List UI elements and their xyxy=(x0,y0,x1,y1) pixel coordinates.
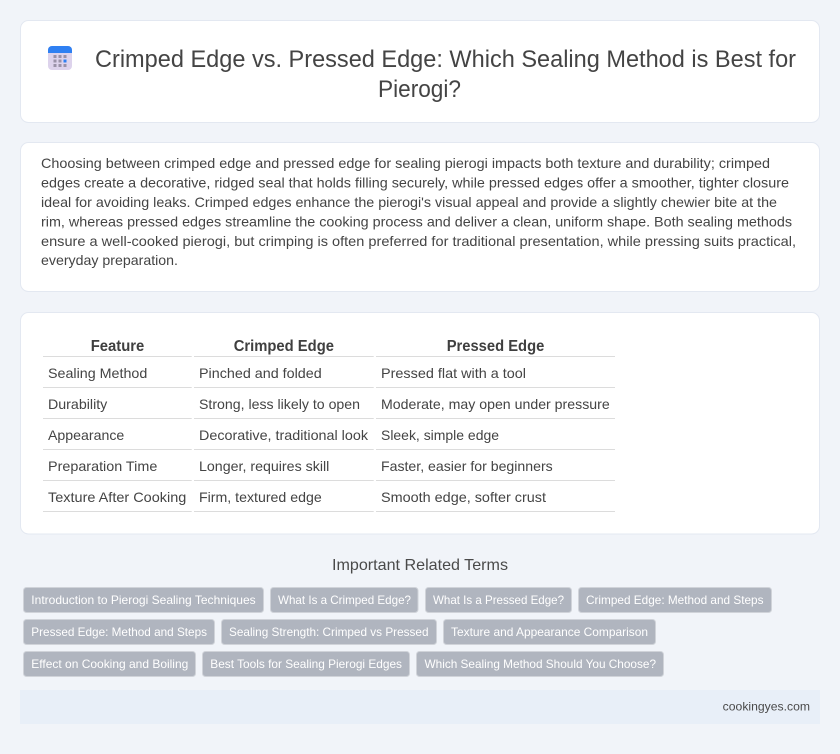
tag xyxy=(24,588,264,612)
tag xyxy=(444,620,656,644)
table row: texture after cooking xyxy=(48,489,546,505)
text block: intro paragraph: Choosing between crimped edge and pressed edge for sealing pierogi impacts both texture and durability; crimped xyxy=(41,155,770,171)
table row: texture after cooking: Smooth edge, softer crust xyxy=(381,489,546,505)
table header row: Feature xyxy=(91,338,144,355)
text block: intro paragraph: ideal for avoiding leaks. Crimped edges enhance the pierogi's visual appeal and provide a slightly chewier bite at the xyxy=(41,194,777,210)
table row: durability: Durability xyxy=(48,396,107,412)
tag xyxy=(416,652,664,676)
tag xyxy=(24,620,214,644)
table header row xyxy=(91,338,544,355)
table row: appearance: Appearance xyxy=(48,427,125,443)
panel: introduction xyxy=(20,142,820,292)
table row: texture after cooking: Firm, textured edge xyxy=(199,489,322,505)
text block: intro paragraph xyxy=(41,155,796,268)
tag: Introduction to Pierogi Sealing Techniques xyxy=(31,593,256,607)
title xyxy=(95,46,796,103)
text block: intro paragraph: everyday preparation. xyxy=(41,252,178,268)
table row: preparation time: Preparation Time xyxy=(48,458,158,474)
table row: sealing method: Sealing Method xyxy=(48,365,147,381)
table row: preparation time xyxy=(48,458,553,474)
tag: What Is a Pressed Edge? xyxy=(433,593,564,607)
icon: calendar xyxy=(48,46,72,70)
tag xyxy=(24,652,196,676)
table row: preparation time: Longer, requires skill xyxy=(199,458,329,474)
tag: Texture and Appearance Comparison xyxy=(451,625,648,639)
tag xyxy=(222,620,436,644)
table row: appearance xyxy=(48,427,499,443)
tag list: related terms xyxy=(24,588,772,676)
table header row: Pressed Edge xyxy=(447,338,544,355)
tag xyxy=(202,652,410,676)
table row: preparation time: Faster, easier for beginners xyxy=(381,458,553,474)
footer bar xyxy=(20,690,820,724)
table row: appearance: Decorative, traditional look xyxy=(199,427,369,443)
table row: sealing method: Pressed flat with a tool xyxy=(381,365,526,381)
text block: intro paragraph: edges create a decorative, ridged seal that holds filling securely, while pressed edges offer a smoother, tighter closure xyxy=(41,174,789,190)
title: Pierogi? xyxy=(378,76,461,103)
table row: appearance: Sleek, simple edge xyxy=(381,427,499,443)
tag: Sealing Strength: Crimped vs Pressed xyxy=(229,625,428,639)
table row: texture after cooking: Texture After Cooking xyxy=(48,489,186,505)
text block: intro paragraph: ensure a well-cooked pierogi, but crimping is often preferred for traditional presentation, while pressing suits practical, xyxy=(41,233,796,249)
table row: durability xyxy=(48,396,610,412)
panel: comparison table xyxy=(20,312,820,534)
table row: sealing method: Pinched and folded xyxy=(199,365,322,381)
tag: Crimped Edge: Method and Steps xyxy=(586,593,764,607)
tag: Effect on Cooking and Boiling xyxy=(31,657,188,671)
table row: durability: Strong, less likely to open xyxy=(199,396,360,412)
footer source text: cookingyes.com xyxy=(723,700,810,714)
tag xyxy=(426,588,572,612)
tag: What Is a Crimped Edge? xyxy=(278,593,411,607)
tag: Best Tools for Sealing Pierogi Edges xyxy=(210,657,402,671)
tag: Which Sealing Method Should You Choose? xyxy=(424,657,656,671)
tag: Pressed Edge: Method and Steps xyxy=(31,625,207,639)
tag xyxy=(270,588,418,612)
table row: durability: Moderate, may open under pressure xyxy=(381,396,610,412)
table header row: Crimped Edge xyxy=(234,338,334,355)
text block: intro paragraph: rim, whereas pressed edges streamline the cooking process and deliver a clean, uniform shape. Both sealing methods xyxy=(41,214,792,230)
tag xyxy=(578,588,772,612)
heading: related terms: Important Related Terms xyxy=(332,557,508,574)
title: Crimped Edge vs. Pressed Edge: Which Sealing Method is Best for xyxy=(95,46,796,73)
panel: header xyxy=(20,20,820,122)
table row: sealing method xyxy=(48,365,526,381)
